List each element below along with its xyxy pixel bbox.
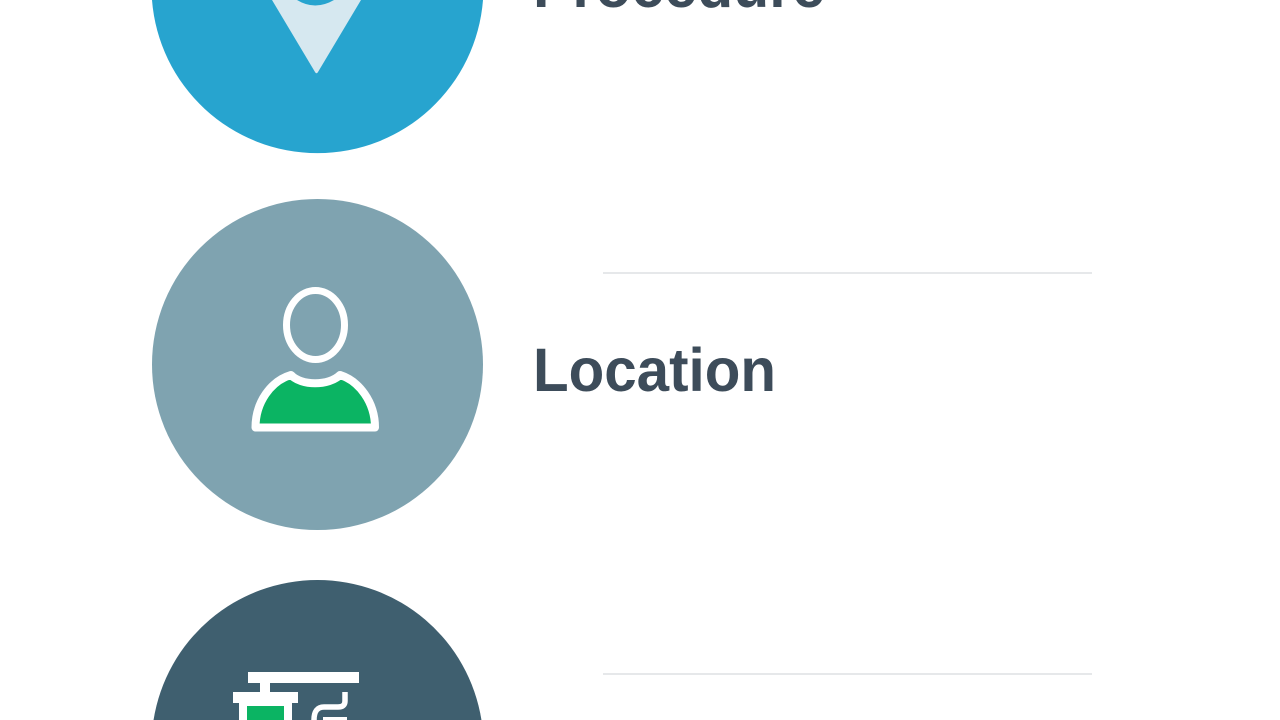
divider above third item xyxy=(603,673,1092,675)
heading: Location: Location xyxy=(533,336,776,404)
row: Procedure xyxy=(152,0,825,153)
row: Location xyxy=(152,199,1092,530)
icon: blue circle with map pin xyxy=(152,0,483,153)
icon: dark circle with equipment xyxy=(154,580,481,720)
row: third item xyxy=(154,580,1092,720)
icon: grey circle with person xyxy=(152,199,483,530)
divider above Location xyxy=(603,272,1092,274)
